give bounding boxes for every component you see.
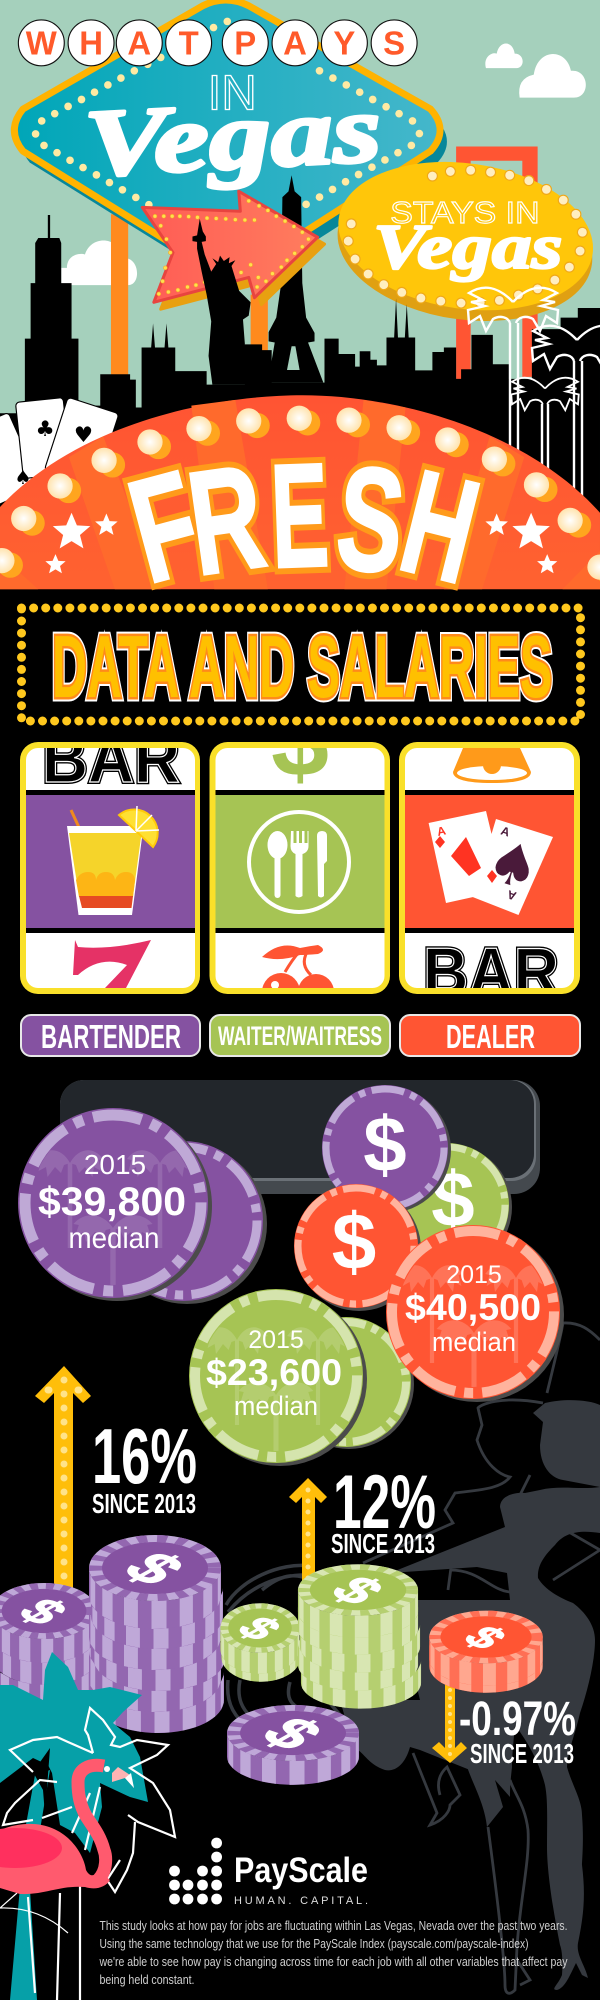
label: bartender: BARTENDER [41,1018,181,1055]
chip stack: green small [220,1603,301,1682]
chip text: $40,500 [405,1287,541,1328]
FRESH lettering fill: H [387,439,493,615]
chip stack: purple tall: $ [107,1544,200,1594]
reel top: BAR: BAR [42,721,180,797]
chip stack: purple left: $ [6,1591,81,1632]
stat: -0.97% since 2013 [459,1693,576,1769]
sign bulbs [32,18,423,209]
Statue of Liberty silhouette [192,219,251,385]
chip text: $39,800 [38,1180,186,1224]
icon: cocktail [67,806,159,915]
marquee balls: WHAT PAYS: H [79,25,103,62]
wordmark: PayScale [234,1851,368,1890]
FRESH lettering outline: R [179,433,274,606]
chip: purple 2015 back [103,1141,267,1304]
FRESH lettering outline: F [114,439,216,614]
heading text: DATA AND SALARIES [52,618,552,716]
label: waiter/waitress: WAITER/WAITRESS [218,1021,382,1051]
slot reel: bartender [20,721,200,994]
clouds [61,44,586,285]
footer note [99,1918,568,1987]
chip: green dollar: $ [431,1155,475,1243]
chip text [38,1149,186,1255]
reel bottom: cherries [262,945,334,988]
PayScale logo [169,1838,368,1907]
yellow oval sign [328,146,600,337]
marquee balls: WHAT PAYS [18,20,417,66]
FRESH lettering outline: H [387,439,493,615]
label: dealer [400,1015,580,1056]
FRESH lettering fill: S [330,435,411,605]
marquee balls: WHAT PAYS: Y [333,25,355,62]
chip: purple single [227,1705,359,1785]
stat: 16% since 2013: SINCE 2013 [92,1488,196,1519]
logo dots [169,1838,222,1904]
chip stack: green tall [298,1564,421,1709]
teal palm tree [0,1652,148,2000]
text: STAYS IN: STAYS IN [390,196,540,230]
chip stack: red single: $ [452,1620,518,1655]
chip: purple dollar: $ [363,1100,407,1188]
marquee balls: WHAT PAYS: P [234,25,256,62]
chip: green 2015 median [189,1289,367,1480]
chip text: median [68,1222,160,1255]
slot reel: dealer [399,742,580,1010]
chip: red 2015 median [386,1225,564,1418]
label: bartender [21,1015,200,1056]
icon: playing cards [429,811,553,915]
sign posts [111,147,538,381]
FRESH lettering fill: E [268,432,331,599]
reel top: bell [453,748,531,783]
heading box: Data and Salaries [22,608,580,721]
playing cards: ♥ [74,423,93,448]
background: black lower section [0,589,600,2000]
chip stack: purple left [0,1583,99,1753]
chip: green dollar [385,1143,512,1269]
arrow up: bartender growth [35,1366,91,1590]
showgirl silhouette [226,1323,600,1993]
marquee balls: WHAT PAYS: W [26,25,58,62]
label: waiter/waitress [210,1015,390,1056]
stat: 12% since 2013: SINCE 2013 [331,1528,435,1559]
feather tail [340,1700,470,1770]
dotted marquee border [22,608,580,721]
text: Vegas: Vegas [82,75,384,197]
FRESH lettering outline: S [330,435,411,605]
stat: 12% since 2013: 12% [333,1460,436,1545]
marquee balls: WHAT PAYS: A [283,25,307,62]
reel bottom: BAR [425,946,558,988]
stat: 16% since 2013: 16% [92,1412,197,1500]
slot reel: waiter [210,742,390,994]
dome bulbs [0,406,600,584]
chip text [405,1261,541,1357]
tower arch [287,346,300,370]
marquee balls: WHAT PAYS: A [127,25,151,62]
feather plumes [226,1565,350,1732]
marquee balls: WHAT PAYS: T [179,25,199,62]
icon: playing cards: ♠ [478,825,549,905]
chip: purple single: $ [245,1709,338,1759]
chip text [206,1326,342,1421]
reel top: BAR: BAR [42,721,180,797]
dark sign panel [60,1080,540,1194]
FRESH lettering outline: E [268,432,331,599]
Eiffel tower silhouette [268,175,323,383]
chip text: $23,600 [206,1352,342,1393]
marquee balls: WHAT PAYS: S [383,25,405,62]
stars [45,513,557,573]
body and legs [390,1487,600,1990]
arrow sign [142,191,324,309]
chip: purple 2015 median [18,1108,212,1313]
chip stack: green small: $ [225,1610,293,1647]
chip: purple dollar [322,1085,451,1213]
white outline palm [0,1708,175,2000]
stat: 12% since 2013 [331,1460,436,1559]
flamingo [0,1765,134,1894]
header illustration [0,0,600,589]
reel top: dollar sign: $ [271,683,329,799]
chip text: median [234,1391,318,1421]
dome rays [0,400,600,589]
arrow down: dealer decline [432,1680,467,1763]
FRESH lettering fill: F [114,439,216,614]
chip stack: red single [429,1611,543,1693]
head and headdress [533,1400,600,1487]
chip text: median [432,1327,516,1357]
label: dealer: DEALER [446,1018,535,1055]
FRESH marquee dome [0,395,600,615]
reel bottom: 7 [73,940,151,988]
icon: playing cards: A [499,824,512,840]
stat: 16% since 2013 [92,1412,197,1519]
tagline: HUMAN. CAPITAL. [234,1895,368,1907]
FRESH lettering outline [114,432,493,615]
oval bulbs [343,165,587,308]
chip: green 2015 back [281,1317,414,1449]
costume outline strokes [363,1323,600,1993]
playing cards: ♣ [36,417,55,442]
icon: playing cards: A [505,887,518,903]
teal Welcome-style sign [14,0,447,285]
text: IN: IN [208,66,257,120]
chip: red dollar: $ [332,1197,376,1286]
playing cards: ♠ [14,466,32,489]
heading text: DATA AND SALARIES [52,618,552,716]
icon: plate and cutlery [249,812,349,912]
city skyline [0,215,600,589]
chip stack: purple tall [89,1535,225,1733]
FRESH lettering fill: R [179,433,274,606]
chip stack: green tall: $ [317,1568,399,1612]
footer note: being held constant. [100,1972,194,1987]
chip text: 2015 [84,1149,146,1180]
text: Vegas small: Vegas [373,212,562,282]
background: sky [0,0,600,589]
chip text: 2015 [248,1326,304,1354]
arrow up: waiter growth [289,1478,327,1590]
arrow bulbs [153,199,310,296]
chip: red dollar [294,1184,421,1311]
reel bottom: BAR: BAR [423,934,559,1010]
icon: playing cards: A [436,823,447,839]
FRESH lettering fill [114,432,493,615]
reel bottom: BAR: BAR [423,934,559,1010]
playing cards [0,397,119,506]
outlined palm trees [468,288,600,530]
reel top: BAR [44,748,182,784]
chip text: 2015 [446,1261,502,1289]
